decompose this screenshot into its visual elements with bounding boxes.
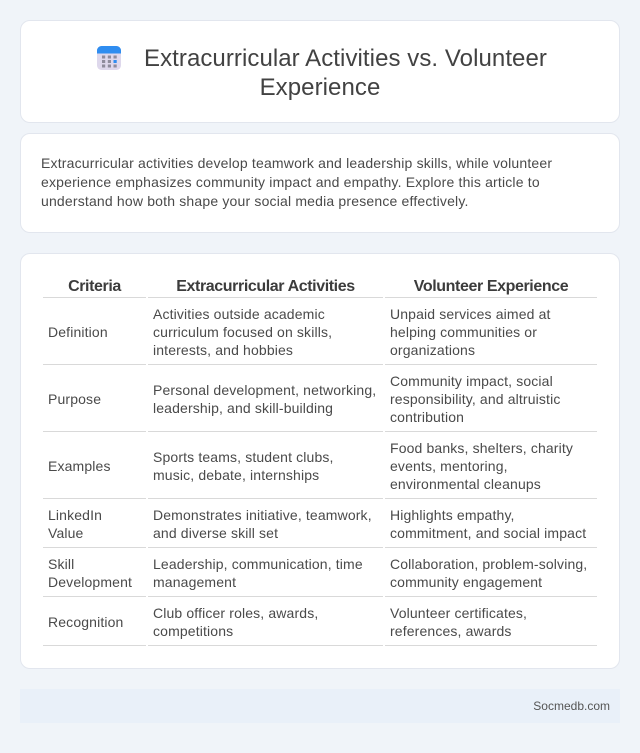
row: examples: Examples bbox=[48, 458, 111, 474]
title: Extracurricular Activities vs. Volunteer bbox=[144, 45, 547, 72]
row: linkedin value: Value bbox=[48, 525, 83, 541]
row: skill development: Skill bbox=[48, 556, 74, 572]
row: definition: organizations bbox=[390, 342, 475, 358]
row: recognition: references, awards bbox=[390, 623, 512, 639]
intro text bbox=[41, 155, 552, 209]
intro text: Extracurricular activities develop teamwork and leadership skills, while volunteer bbox=[41, 155, 552, 171]
header panel bbox=[20, 20, 620, 123]
row: recognition: Volunteer certificates, bbox=[390, 605, 527, 621]
intro text: understand how both shape your social media presence effectively. bbox=[41, 193, 469, 209]
row: definition: curriculum focused on skills, bbox=[153, 324, 332, 340]
footer credit: Socmedb.com bbox=[533, 699, 610, 713]
row: skill development: Collaboration, problem-solving, bbox=[390, 556, 587, 572]
row: examples: Sports teams, student clubs, bbox=[153, 449, 334, 465]
header: criteria: Criteria bbox=[68, 278, 121, 295]
row: skill development bbox=[48, 556, 587, 590]
row: purpose: Purpose bbox=[48, 391, 101, 407]
row: definition: Activities outside academic bbox=[153, 306, 325, 322]
row: recognition: Club officer roles, awards, bbox=[153, 605, 318, 621]
title bbox=[144, 45, 547, 101]
row: definition: Unpaid services aimed at bbox=[390, 306, 551, 322]
row: examples: music, debate, internships bbox=[153, 467, 319, 483]
row: skill development: management bbox=[153, 574, 236, 590]
row: definition: helping communities or bbox=[390, 324, 537, 340]
row: recognition bbox=[48, 605, 527, 639]
header: volunteer experience: Volunteer Experience bbox=[414, 278, 568, 295]
comparison table bbox=[43, 278, 597, 646]
row: linkedin value: LinkedIn bbox=[48, 507, 102, 523]
row: skill development: Development bbox=[48, 574, 132, 590]
row: linkedin value: Demonstrates initiative, teamwork, bbox=[153, 507, 372, 523]
row: purpose: contribution bbox=[390, 409, 464, 425]
row: purpose: Personal development, networking, bbox=[153, 382, 376, 398]
row: definition: interests, and hobbies bbox=[153, 342, 293, 358]
row: examples: environmental cleanups bbox=[390, 476, 541, 492]
row: purpose: leadership, and skill-building bbox=[153, 400, 333, 416]
footer bar bbox=[20, 689, 620, 723]
row: purpose bbox=[48, 373, 560, 425]
row: linkedin value: commitment, and social impact bbox=[390, 525, 586, 541]
row: recognition: competitions bbox=[153, 623, 233, 639]
row: examples: events, mentoring, bbox=[390, 458, 508, 474]
row: skill development: community engagement bbox=[390, 574, 542, 590]
comparison table panel bbox=[20, 253, 620, 669]
intro text: experience emphasizes community impact and empathy. Explore this article to bbox=[41, 174, 540, 190]
row: linkedin value bbox=[48, 507, 586, 541]
title: Experience bbox=[260, 74, 380, 101]
row: examples: Food banks, shelters, charity bbox=[390, 440, 573, 456]
row: recognition: Recognition bbox=[48, 614, 123, 630]
row: examples bbox=[48, 440, 573, 492]
intro panel bbox=[20, 133, 620, 233]
row: definition bbox=[48, 306, 551, 358]
row: purpose: responsibility, and altruistic bbox=[390, 391, 560, 407]
row: definition: Definition bbox=[48, 324, 108, 340]
row: linkedin value: and diverse skill set bbox=[153, 525, 278, 541]
row: skill development: Leadership, communication, time bbox=[153, 556, 363, 572]
row: purpose: Community impact, social bbox=[390, 373, 553, 389]
row: linkedin value: Highlights empathy, bbox=[390, 507, 515, 523]
icon: calendar bbox=[97, 46, 121, 70]
header: extracurricular activities: Extracurricular Activities bbox=[176, 278, 355, 295]
